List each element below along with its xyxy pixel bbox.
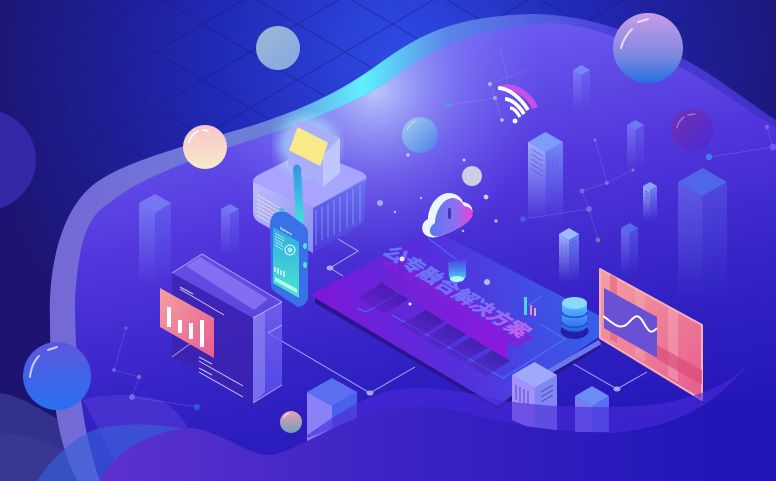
dark background circle [0,110,36,210]
extruded title wall: 公专融合解决方案 [377,252,537,350]
platform circuit outlines [357,238,565,378]
foreground block server [512,362,557,430]
server tower with windows [528,132,563,222]
foreground translucent band [300,362,750,440]
bottom left background waves [0,393,110,481]
title text on platform: 公专融合解决方案 [377,243,537,341]
background building 2 [221,204,239,255]
walkie talkie device [270,208,308,307]
pink bar chart card [160,288,214,358]
sphere pale teal [256,26,300,70]
small tower 6 [643,182,657,220]
foreground block small [575,386,609,432]
hologram cup [448,260,466,282]
background building 9 large [678,168,727,300]
constellation lines [114,50,773,407]
central platform [315,232,612,410]
database icon [560,297,588,339]
sphere large purple blue [613,13,683,83]
server box with ports [253,150,366,253]
background building 1 [139,194,171,285]
sphere light blue [402,117,438,153]
recessed steps under title [358,282,510,376]
light spikes [524,297,536,316]
pink monitor panel with wave [600,269,702,400]
walkie talkie device: Sphere [280,225,292,237]
antenna [293,164,304,222]
sphere small pink [280,411,302,433]
monitor with glowing yellow screen [278,117,340,187]
background building 8 [621,223,638,275]
small white tower 7 [559,228,579,282]
sphere dim purple [671,109,713,151]
constellation nodes [112,82,776,410]
wifi icon [498,87,535,123]
circuit lines with nodes [268,239,647,395]
lower left layered waves [37,395,195,481]
sphere grey small [462,166,482,186]
glass panel box [172,254,282,403]
foreground block left [307,378,357,458]
sphere cream pink [183,125,227,169]
background building 3 [573,65,590,110]
foreground purple wave [100,398,776,481]
cloud icon [422,193,473,238]
small title dots [400,256,490,306]
background building 4 [627,120,644,170]
sphere blue bottom left [23,342,91,410]
